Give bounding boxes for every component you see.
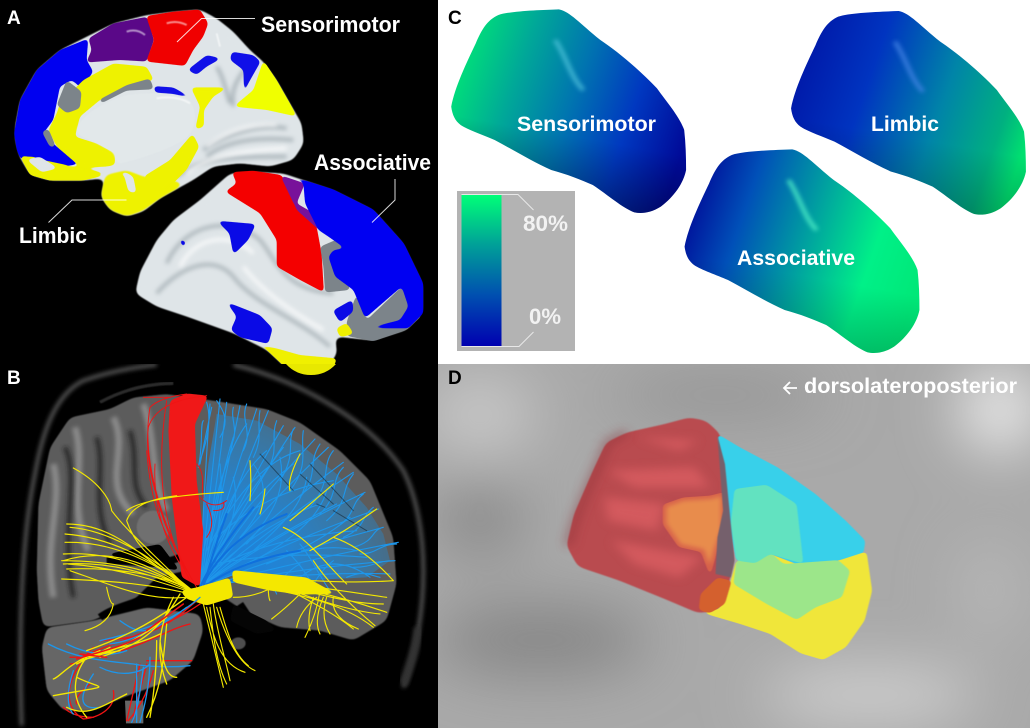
blue associative fibres — [198, 399, 398, 594]
panel letter D: D — [448, 368, 462, 389]
leader line: Sensorimotor — [177, 18, 255, 42]
medial hemisphere surface — [14, 9, 304, 217]
blurred grey MRI background — [425, 370, 1030, 720]
panel C: connectivity probability maps — [438, 0, 1030, 364]
map: Limbic — [791, 11, 1026, 215]
label: Associative: Associative — [314, 150, 431, 175]
red sensorimotor territory — [566, 417, 734, 613]
orange overlap in red territory — [665, 494, 723, 571]
thalamus model — [566, 417, 872, 660]
brainstem and cerebellar fibres — [48, 594, 200, 722]
panel B: tractography on MRI slice — [0, 364, 438, 728]
legend label: 0%: 0% — [529, 304, 561, 329]
arrow — [784, 382, 797, 394]
colour legend — [457, 191, 575, 351]
legend label: 80%: 80% — [523, 211, 568, 236]
yellow limbic fibres — [62, 454, 393, 687]
panel A: cortical surface maps on black — [0, 0, 438, 375]
label: Limbic: Limbic — [19, 223, 87, 248]
yellow tip of temporal pole overlapping panel B — [286, 364, 336, 375]
orientation arrow and label — [782, 378, 1017, 398]
map: Associative — [685, 149, 919, 353]
dark interface wedge — [716, 436, 734, 577]
panel letter C: C — [448, 8, 462, 29]
legend leaders — [462, 194, 534, 346]
leader line: Associative — [372, 179, 395, 222]
fibre tracts — [48, 393, 398, 722]
red sensorimotor fibres — [143, 393, 227, 587]
panel D: 3D thalamic subdivisions — [425, 364, 1030, 728]
yellow limbic territory — [700, 551, 872, 660]
legend gradient bar — [462, 195, 502, 346]
panel letter B: B — [7, 368, 21, 389]
green overlap in limbic territory — [733, 552, 850, 620]
lateral hemisphere surface — [135, 171, 423, 375]
map: Sensorimotor — [451, 9, 686, 213]
label: Sensorimotor: Sensorimotor — [517, 112, 657, 136]
lower orange overlap — [699, 577, 732, 613]
label: Associative: Associative — [737, 246, 855, 270]
MRI background: skull and brain — [20, 365, 423, 726]
panel letter A: A — [7, 8, 21, 29]
cyan associative territory — [717, 433, 865, 566]
green overlap in associative territory — [731, 485, 804, 564]
label: Limbic: Limbic — [871, 112, 939, 136]
leader line: Limbic — [48, 200, 126, 222]
label: dorsolateroposterior: dorsolateroposterior — [804, 374, 1018, 398]
label: Sensorimotor: Sensorimotor — [261, 12, 400, 37]
